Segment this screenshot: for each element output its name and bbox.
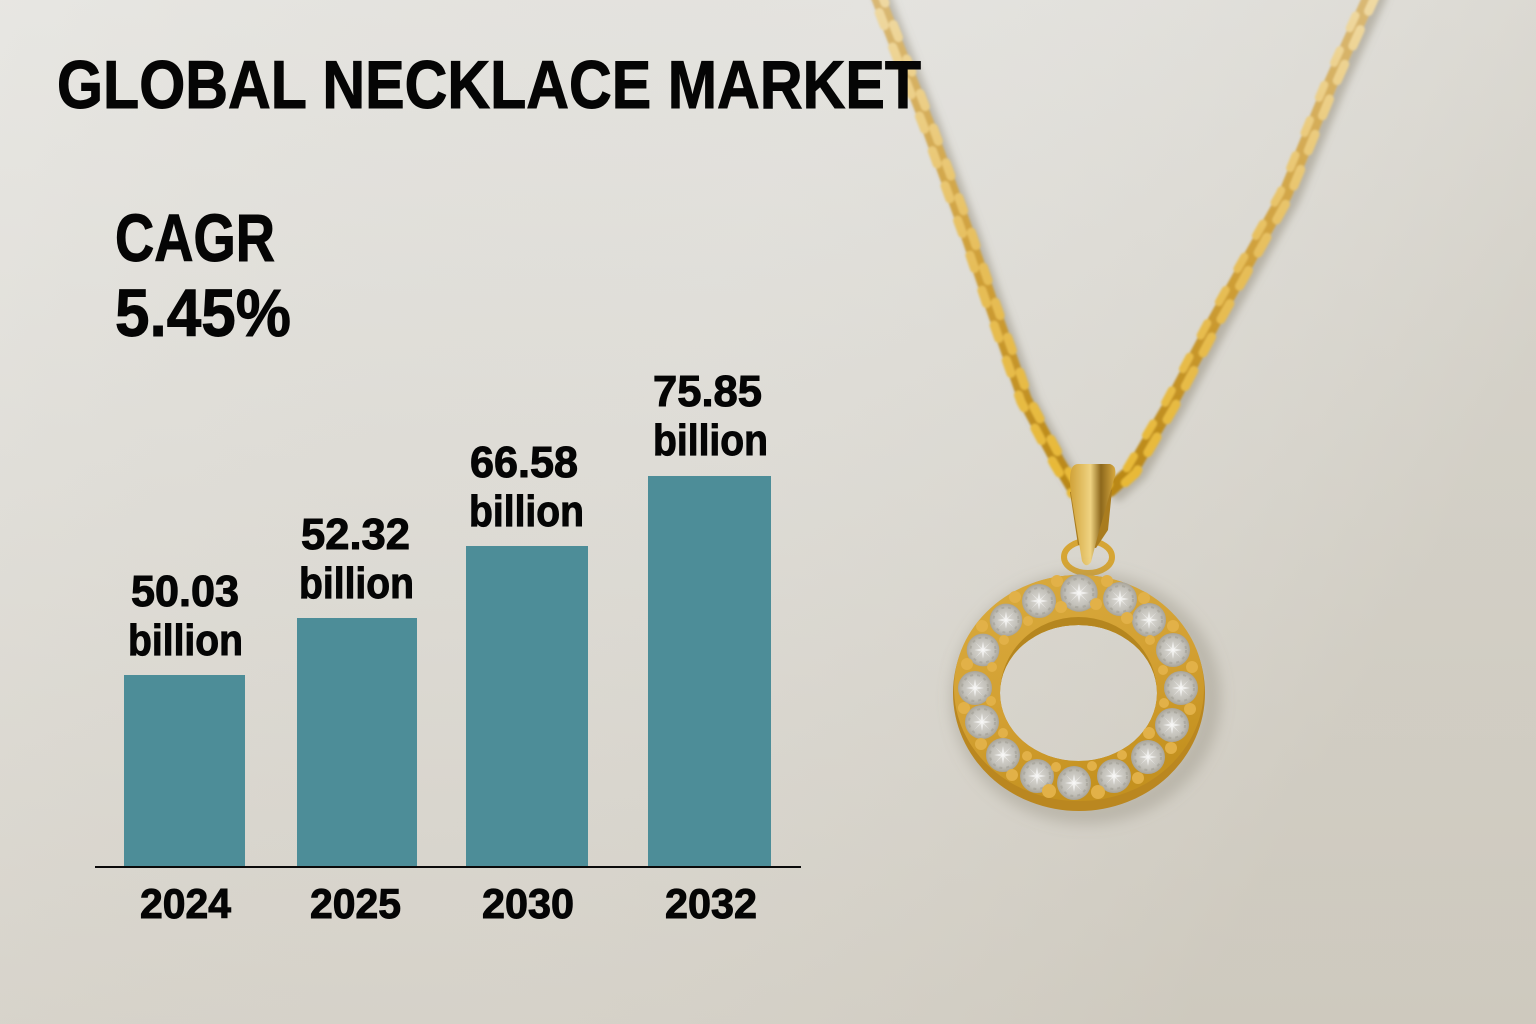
bar: 2032 [648, 367, 771, 927]
title: GLOBAL NECKLACE MARKET [57, 47, 921, 123]
bar: 2030: 66.58 [470, 438, 578, 487]
pendant: diamonds [958, 574, 1198, 800]
bar: 2032: 2032 [665, 880, 757, 927]
pendant: shadow [962, 583, 1210, 813]
bar chart [95, 367, 801, 927]
necklace chain: right strand [1105, 0, 1380, 494]
bar: 2025: billion [299, 559, 414, 608]
bar: 2030 [466, 438, 588, 927]
bar: 2032: billion [653, 416, 768, 465]
chart baseline [95, 866, 801, 868]
bar: 2024: billion [128, 616, 243, 665]
bar: 2032: 75.85 [653, 367, 762, 416]
bar: 2024 [124, 567, 245, 927]
necklace chain: left strand [872, 0, 1083, 495]
CAGR callout [115, 201, 291, 351]
bar: 2025: 52.32 [301, 510, 410, 559]
pendant: gold prongs [958, 575, 1198, 799]
bar: 2030: 2030 [482, 880, 574, 927]
bar: 2025: 2025 [310, 880, 401, 927]
bar: 2024: 2024 [140, 880, 232, 927]
bar: 2024: 50.03 [131, 567, 239, 616]
CAGR callout: 5.45% [115, 276, 291, 351]
pendant: bail and jump ring [1064, 464, 1115, 573]
bar: 2030: billion [469, 487, 584, 536]
CAGR callout: CAGR [115, 201, 275, 276]
pendant: gold circle setting [953, 575, 1205, 811]
bar: 2025 [297, 510, 417, 927]
